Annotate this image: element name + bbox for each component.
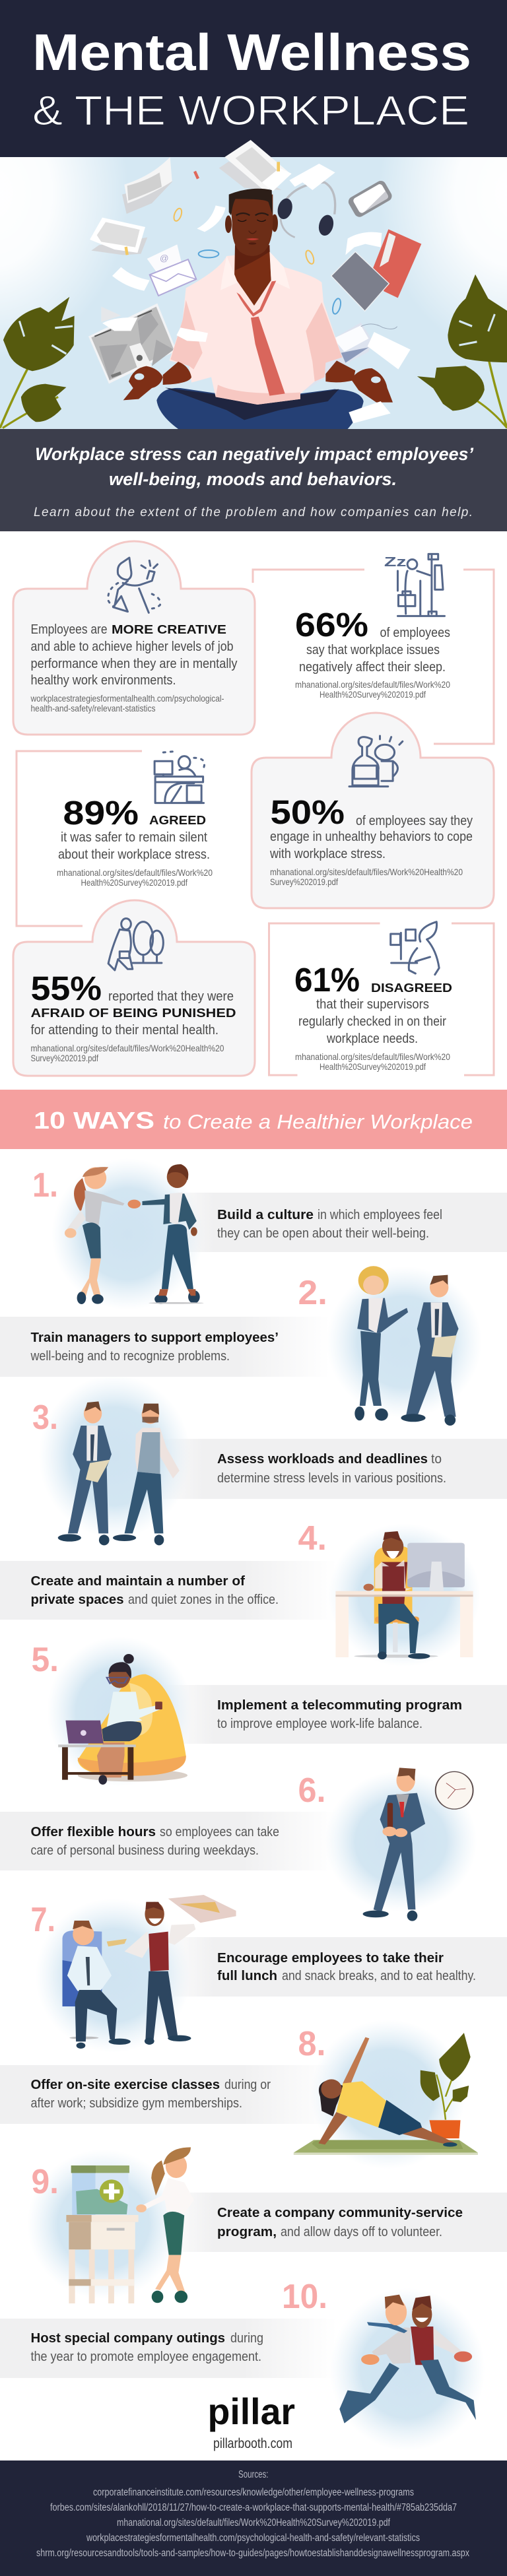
panel: 55 percent: Survey%202019.pdf: [30, 1053, 98, 1063]
step 7: [30, 1895, 507, 2053]
website: pillarbooth.com: [213, 2436, 292, 2451]
intro heading: [35, 444, 473, 489]
panel: 66 percent: negatively affect their sleep.: [299, 659, 446, 675]
figure: two men jumping: [330, 2288, 485, 2451]
icon: potted plant: [421, 2033, 471, 2138]
panel: 61 percent: [269, 922, 494, 1075]
figure: man at desk: [328, 1523, 480, 1667]
man: right forearm and hand: [325, 360, 393, 403]
icon: sleeping commuter: Zz: [384, 554, 407, 570]
panel: 61 percent: workplace needs.: [326, 1031, 418, 1046]
icon: wall clock: [436, 1771, 473, 1809]
icon: grey binder: [331, 251, 389, 311]
big number: 66%: [295, 606, 368, 644]
stat text: DISAGREED: [371, 981, 452, 995]
source: workplacestrategiesformentalhealth.com/psychological-: [30, 693, 224, 704]
stat text: AGREED: [149, 814, 206, 827]
panel: 66 percent: say that workplace issues: [306, 642, 440, 657]
icon: envelope: @: [160, 253, 169, 263]
number: 8.: [298, 2025, 326, 2063]
number: 6.: [298, 1771, 326, 1810]
panel: more creative: performance when they are in mentally: [30, 656, 238, 671]
panel: 55 percent: AFRAID OF BEING PUNISHED: [30, 1007, 236, 1020]
banner heading italic: to Create a Healthier Workplace: [163, 1110, 473, 1133]
man: shirt: [170, 251, 342, 405]
step text: Train managers to support employees’: [30, 1330, 279, 1345]
step 9: program,: [217, 2224, 277, 2239]
step 3: determine stress levels in various positions.: [217, 1470, 446, 1486]
step 1: in which employees feel: [318, 1207, 442, 1222]
panel: more creative: health-and-safety/relevant-statistics: [30, 703, 156, 713]
footer: sources: [0, 2460, 507, 2576]
sources heading: Sources:: [238, 2469, 268, 2480]
step text: Offer flexible hours: [30, 1824, 156, 1839]
number: 1.: [32, 1166, 58, 1205]
step text: Host special company outings: [30, 2330, 225, 2346]
title line two: & THE WORKPLACE: [32, 88, 469, 134]
banner: 10 ways: [0, 1090, 507, 1149]
icon: yoga mat: [294, 2140, 478, 2155]
figure: two women shaking hands: [51, 1158, 204, 1310]
step 6: care of personal business during weekdays.: [30, 1843, 259, 1858]
step 5: to improve employee work-life balance.: [217, 1716, 422, 1731]
man: pants: [156, 387, 364, 429]
step 8: [0, 2020, 478, 2169]
step 2: well-being and to recognize problems.: [30, 1348, 230, 1364]
paper clips and pins: [126, 162, 342, 315]
icon: headset: [275, 164, 335, 238]
panel: 50 percent: with workplace stress.: [269, 846, 386, 861]
step 4: and quiet zones in the office.: [128, 1592, 279, 1607]
source: mhanational.org/sites/default/files/Work%20: [295, 679, 450, 690]
hero illustration: [88, 140, 421, 429]
icon: creative person: [108, 558, 160, 612]
icon: grey laptop: [88, 304, 176, 383]
step 3: [32, 1375, 507, 1545]
big number: 89%: [63, 794, 139, 832]
step text: Build a culture: [217, 1207, 314, 1222]
icon: donation box: [71, 2165, 129, 2216]
title line one: Mental Wellness: [32, 23, 471, 81]
source list: [36, 2487, 469, 2559]
source: mhanational.org/sites/default/files/Work%20Health%20: [30, 1043, 224, 1053]
panel: 61 percent: that their supervisors: [316, 997, 429, 1012]
panel: 66 percent: [253, 554, 494, 744]
panel: 89 percent: Health%20Survey%202019.pdf: [81, 877, 187, 888]
step text: Encourage employees to take their: [217, 1950, 444, 1965]
header band: [0, 0, 507, 157]
panel: 50 percent: engage in unhealthy behaviors to cope: [270, 829, 473, 844]
step 9: and allow days off to volunteer.: [281, 2224, 442, 2239]
figure: woman in side plank: [294, 2020, 478, 2169]
step text: Implement a telecommuting program: [217, 1698, 462, 1713]
man: collar: [220, 251, 290, 290]
source: mhanational.org/sites/default/files/Work%20Health%20: [270, 867, 463, 877]
step 10: during: [230, 2330, 263, 2346]
big number: 61%: [294, 961, 360, 999]
stat text: of employees: [380, 625, 450, 640]
step 4: private spaces: [30, 1592, 124, 1607]
number: 10.: [282, 2278, 327, 2316]
figure: man checking watch beside clock: [325, 1767, 477, 1921]
step 6: so employees can take: [160, 1824, 279, 1839]
man: head: [225, 189, 278, 256]
intro band: [0, 429, 507, 531]
step 7: and snack breaks, and to eat healthy.: [282, 1968, 476, 1983]
panel: 55 percent: [13, 900, 255, 1076]
icon: sleeping commuter: [384, 554, 444, 616]
icon: phone: [347, 179, 393, 219]
source: mhanational.org/sites/default/files/Work%20: [57, 867, 213, 878]
icon: person walking past trees: [108, 919, 163, 970]
number: 7.: [30, 1901, 55, 1939]
logo: [207, 2391, 295, 2451]
intro heading: well-being, moods and behaviors.: [109, 469, 397, 489]
icon: side cabinet: [66, 2215, 139, 2303]
panel: 61 percent: Health%20Survey%202019.pdf: [320, 1061, 426, 1072]
figure: woman on beanbag with laptop: [47, 1637, 192, 1787]
figure: colleagues sharing pizza: [36, 1895, 236, 2053]
step 2: [0, 1266, 482, 1426]
number: 5.: [32, 1641, 59, 1679]
figure: woman beside donation box: [28, 2147, 194, 2303]
number: 9.: [32, 2163, 59, 2201]
intro heading: Workplace stress can negatively impact employees’: [35, 444, 473, 464]
hero background and leaves: [0, 157, 507, 429]
number: 3.: [32, 1399, 58, 1437]
panel: more creative: MORE CREATIVE: [112, 623, 226, 636]
step 10: [0, 2278, 485, 2451]
source list: mhanational.org/sites/default/files/Work%20Health%20Survey%202019.pdf: [117, 2517, 391, 2528]
step 5: [32, 1637, 507, 1787]
big number: 50%: [271, 793, 345, 831]
icon: pizza box: [168, 1895, 236, 1923]
icon: left monstera leaves: [0, 297, 75, 428]
man: tie: [236, 281, 285, 396]
source list: workplacestrategiesformentalhealth.com/psychological-health-and-safety/relevant-statistics: [86, 2532, 420, 2544]
step 4: [0, 1519, 480, 1667]
icon: red folder: [372, 229, 421, 298]
step 6: [0, 1767, 477, 1921]
panel: 89 percent: it was safer to remain silent: [61, 830, 207, 845]
source list: corporatefinanceinstitute.com/resources/knowledge/other/employee-wellness-programs: [93, 2487, 414, 2498]
banner heading bold: 10 WAYS: [34, 1107, 154, 1134]
icon: bottle and beer: [349, 736, 403, 787]
step 1: [32, 1158, 507, 1310]
man: neck: [234, 245, 271, 306]
icon: worker at window: [391, 922, 439, 975]
panel: 50 percent: Survey%202019.pdf: [270, 876, 338, 887]
icon: stressed desk worker: [154, 751, 205, 803]
step 8: after work; subsidize gym memberships.: [30, 2096, 242, 2111]
icon: keyboard: [299, 323, 397, 390]
loose paper scraps: [349, 332, 411, 423]
number: 4.: [298, 1519, 327, 1558]
figure: two men standing: [39, 1375, 191, 1545]
panel: 66 percent: Health%20Survey%202019.pdf: [320, 689, 426, 700]
step text: Offer on-site exercise classes: [30, 2077, 220, 2092]
step 3: to: [431, 1451, 442, 1467]
intro subtext: Learn about the extent of the problem and how companies can help.: [34, 506, 473, 519]
step 8: during or: [224, 2077, 271, 2092]
step 9: [28, 2147, 507, 2303]
stat text: of employees say they: [356, 813, 473, 828]
papers: [90, 140, 382, 291]
panel: more creative: and able to achieve higher levels of job: [30, 639, 234, 654]
icon: right monstera leaves: [417, 275, 507, 428]
step text: Create a company community-service: [217, 2205, 463, 2220]
stat text: Employees are: [30, 622, 107, 637]
panel: 61 percent: regularly checked in on their: [298, 1014, 446, 1029]
figure: man and woman talking: [327, 1266, 482, 1426]
icon: envelope: [147, 244, 196, 296]
panel: more creative: [13, 541, 255, 735]
number: 2.: [298, 1274, 327, 1312]
step 10: the year to promote employee engagement.: [30, 2349, 261, 2364]
panel: 89 percent: [17, 751, 213, 926]
panel: more creative: healthy work environments.: [30, 673, 176, 688]
panel: 50 percent: [252, 713, 494, 908]
panel: 89 percent: about their workplace stress.: [58, 847, 210, 862]
stat text: reported that they were: [108, 989, 234, 1004]
logo: pillar: [207, 2391, 295, 2432]
man: left forearm and hand: [123, 362, 191, 400]
step text: Create and maintain a number of: [30, 1573, 245, 1589]
panel: 55 percent: for attending to their mental health.: [30, 1022, 219, 1038]
source: mhanational.org/sites/default/files/Work%20: [295, 1051, 450, 1062]
step 1: they can be open about their well-being.: [217, 1226, 429, 1241]
step text: Assess workloads and deadlines: [217, 1451, 428, 1467]
step 7: full lunch: [217, 1968, 277, 1983]
big number: 55%: [30, 970, 102, 1007]
